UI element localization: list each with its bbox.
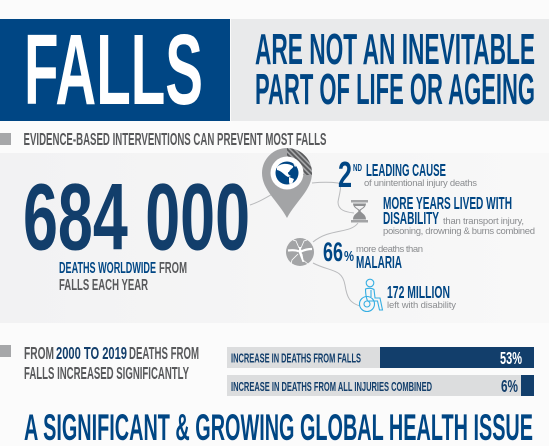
subtitle bbox=[231, 19, 549, 121]
stat: years lived with disability: poisoning, drowning & burns combined bbox=[383, 226, 535, 237]
title: FALLS bbox=[0, 14, 230, 126]
stat: 66% vs malaria: more deaths than bbox=[356, 244, 423, 255]
stat: 2nd leading cause bbox=[338, 154, 477, 195]
bar: falls 53%: 53% bbox=[500, 348, 522, 368]
stat: 66% vs malaria: 66 bbox=[323, 237, 343, 267]
trend text bbox=[0, 343, 199, 383]
trend text: FROM bbox=[24, 343, 54, 363]
icon: hourglass bbox=[351, 200, 368, 222]
deaths caption: FALLS EACH YEAR bbox=[59, 277, 148, 294]
icon: wheelchair bbox=[360, 279, 382, 312]
big number: 684 000 bbox=[23, 164, 250, 270]
stat: 2nd leading cause: of unintentional injury deaths bbox=[364, 178, 477, 189]
title banner bbox=[0, 14, 549, 126]
stat: 66% vs malaria: MALARIA bbox=[356, 252, 402, 272]
stat: years lived with disability: DISABILITY bbox=[383, 208, 439, 228]
bar: falls 53% bbox=[227, 347, 534, 368]
stat: 2nd leading cause: 2 bbox=[338, 154, 352, 195]
stat: 2nd leading cause: LEADING CAUSE bbox=[366, 160, 446, 180]
bar: all injuries 6% bbox=[227, 375, 534, 396]
stat: 172 million: left with disability bbox=[387, 300, 456, 311]
stat: 172 million bbox=[387, 282, 456, 311]
icon: map pin with globe bbox=[262, 148, 312, 218]
trend text: DEATHS FROM bbox=[129, 343, 199, 363]
stat: years lived with disability: than transport injury, bbox=[443, 216, 524, 227]
bar: all injuries 6%: 6% bbox=[501, 376, 518, 396]
deaths caption: FROM bbox=[159, 260, 187, 277]
bar chart bbox=[227, 347, 534, 396]
bar: falls 53%: INCREASE IN DEATHS FROM FALLS bbox=[231, 350, 361, 366]
panel: global statistics bbox=[0, 146, 549, 323]
stat: 66% vs malaria bbox=[323, 237, 423, 272]
trend text: FALLS INCREASED SIGNIFICANTLY bbox=[24, 363, 189, 383]
evidence heading bbox=[0, 129, 326, 149]
title: FALLS: FALLS bbox=[24, 14, 203, 126]
deaths caption bbox=[59, 260, 187, 294]
connector line bbox=[250, 182, 360, 306]
icon: mosquito bbox=[286, 238, 314, 266]
stat: 66% vs malaria: % bbox=[344, 248, 354, 265]
stat: years lived with disability bbox=[383, 193, 535, 237]
deaths caption: DEATHS WORLDWIDE bbox=[59, 260, 156, 277]
trend text: 2000 TO 2019 bbox=[56, 343, 127, 363]
stat: 2nd leading cause: ND bbox=[353, 163, 362, 174]
stat: 172 million: 172 MILLION bbox=[387, 282, 450, 302]
